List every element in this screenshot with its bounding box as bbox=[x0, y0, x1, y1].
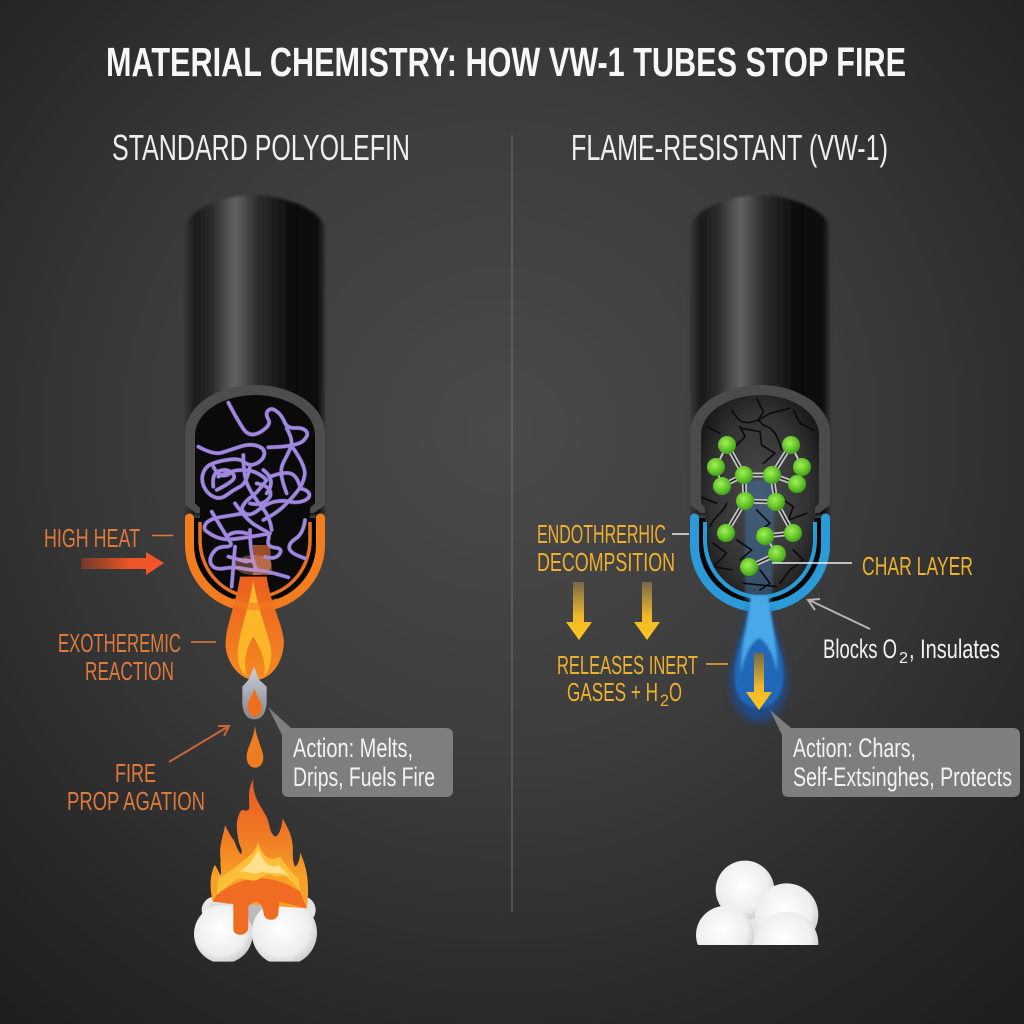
callout: action left: Action: Melts, bbox=[293, 733, 413, 763]
label: releases inert gases: 2 bbox=[660, 691, 669, 710]
label: exothermic reaction bbox=[58, 628, 181, 686]
label: releases inert gases: GASES + H bbox=[567, 677, 658, 707]
tube window rim left bbox=[185, 385, 325, 513]
polymer chains bbox=[198, 403, 309, 587]
heat column bbox=[253, 545, 272, 575]
label: endothermic decomposition bbox=[537, 519, 675, 577]
U-shaped end right bbox=[695, 518, 825, 607]
heading: flame-resistant: FLAME-RESISTANT (VW-1) bbox=[571, 127, 888, 168]
panel: flame-resistant tube bbox=[690, 195, 830, 608]
label: releases inert gases bbox=[557, 650, 698, 710]
label: high heat: HIGH HEAT bbox=[44, 523, 140, 553]
arrow: fire propagation bbox=[169, 726, 229, 762]
label: endothermic decomposition: DECOMPSITION bbox=[537, 547, 675, 577]
arrow: gold in blue flame bbox=[746, 653, 772, 710]
label: char layer: CHAR LAYER bbox=[862, 551, 973, 581]
callout: action right: Action: Chars, bbox=[793, 733, 916, 763]
char layer interior bbox=[701, 395, 819, 597]
cotton left bbox=[194, 896, 317, 965]
flame: exothermic flame below tube bbox=[226, 577, 284, 680]
label: fire propagation: PROP AGATION bbox=[67, 786, 205, 816]
label: endothermic decomposition: ENDOTHRERHIC bbox=[537, 519, 666, 549]
molten drip with flame bbox=[242, 667, 267, 719]
heading: standard polyolefin: STANDARD POLYOLEFIN bbox=[112, 127, 410, 168]
tube body right bbox=[690, 195, 830, 515]
cotton right bbox=[696, 860, 818, 945]
panel: standard polyolefin tube bbox=[184, 195, 325, 608]
molecule atoms bbox=[707, 436, 811, 576]
U band front over flame neck bbox=[232, 601, 278, 606]
arrow: high heat bbox=[81, 552, 164, 575]
falling drop bbox=[247, 726, 263, 768]
burning fire on cotton bbox=[211, 779, 308, 935]
char cracks bbox=[700, 398, 813, 590]
label: exothermic reaction: EXOTHEREMIC bbox=[58, 628, 181, 658]
callout: action left: Drips, Fuels Fire bbox=[293, 762, 435, 792]
char column bbox=[745, 480, 775, 600]
arrow: gold down left bbox=[566, 582, 592, 640]
callout: action right bbox=[770, 710, 1020, 797]
arrow: blocks oxygen pointer bbox=[808, 599, 870, 629]
label: fire propagation bbox=[67, 758, 205, 816]
label: exothermic reaction: REACTION bbox=[85, 656, 174, 686]
U-shaped heated end left bbox=[190, 395, 320, 608]
molecule bonds bbox=[716, 445, 802, 567]
label: fire propagation: FIRE bbox=[115, 758, 156, 788]
tube body left bbox=[184, 195, 325, 515]
arrow: gold down right bbox=[634, 582, 660, 640]
blue U band bbox=[694, 518, 826, 608]
blue flame bbox=[731, 596, 787, 722]
label: releases inert gases: RELEASES INERT bbox=[557, 650, 698, 680]
callout: action left bbox=[268, 707, 453, 797]
label: releases inert gases: O bbox=[669, 677, 682, 707]
label: blocks O2, insulates: Blocks O bbox=[823, 634, 897, 664]
label: blocks O2, insulates bbox=[823, 634, 1000, 667]
tube window rim right bbox=[690, 385, 830, 513]
label: blocks O2, insulates: 2 bbox=[899, 650, 908, 667]
